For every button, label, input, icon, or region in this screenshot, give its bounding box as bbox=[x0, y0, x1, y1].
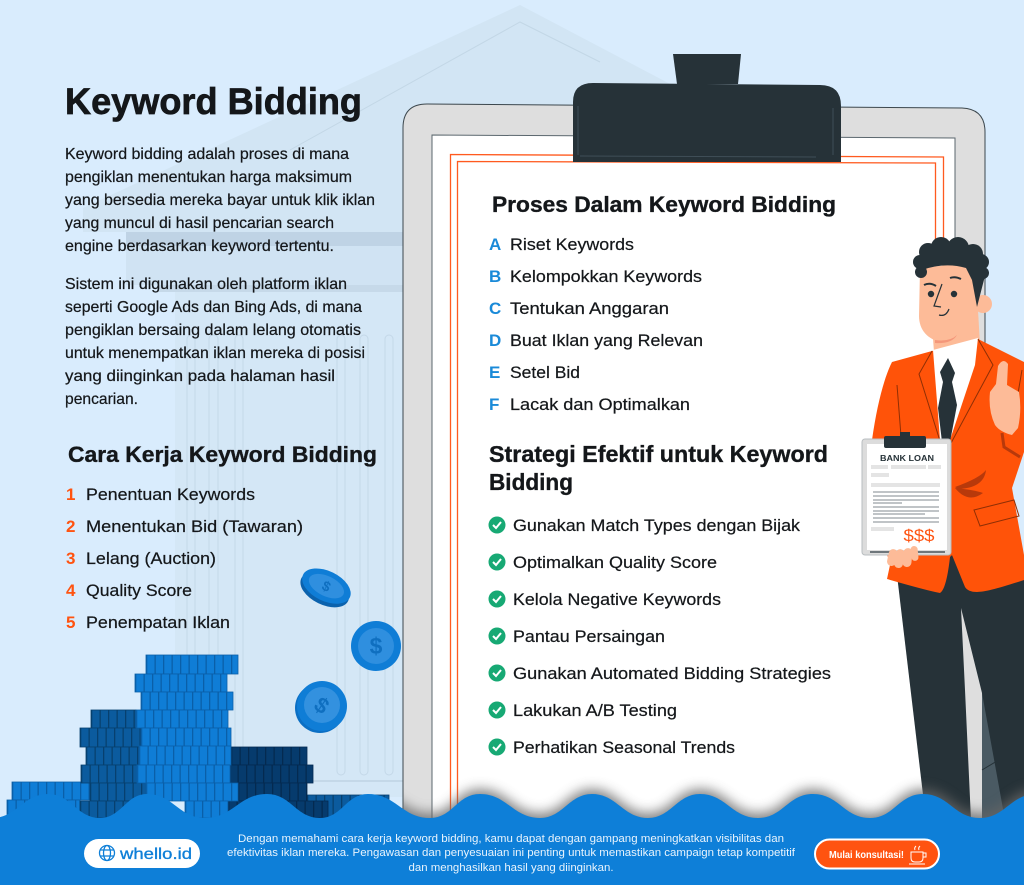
small clipboard: BANK LOAN bbox=[880, 454, 934, 463]
coin stacks bbox=[7, 655, 389, 818]
title: Keyword Bidding bbox=[65, 81, 362, 122]
heading: cara kerja: Cara Kerja Keyword Bidding bbox=[68, 442, 377, 467]
text block: definition paragraph: engine berdasarkan keyword tertentu. bbox=[65, 238, 334, 255]
small clipboard bbox=[862, 432, 951, 555]
text block: system paragraph: Sistem ini digunakan oleh platform iklan bbox=[65, 276, 347, 293]
numbered list: cara kerja: Penentuan Keywords bbox=[86, 485, 255, 504]
badge: whello.id bbox=[84, 839, 200, 868]
numbered list: cara kerja: Menentukan Bid (Tawaran) bbox=[86, 517, 303, 536]
footer text: dan menghasilkan hasil yang diinginkan. bbox=[408, 862, 614, 874]
icon: falling coin 2 bbox=[351, 621, 401, 671]
hair bbox=[913, 237, 989, 307]
numbered list: cara kerja: 1 bbox=[66, 485, 75, 504]
checklist: strategi: Gunakan Automated Bidding Strategies bbox=[513, 664, 831, 683]
numbered list: cara kerja: Quality Score bbox=[86, 581, 192, 600]
icon: falling coin 2: $ bbox=[370, 633, 383, 659]
footer band with wave edge bbox=[0, 794, 1024, 885]
icon: falling coin 1 bbox=[295, 561, 356, 615]
heading: strategi: Strategi Efektif untuk Keyword bbox=[489, 441, 828, 467]
checklist: strategi bbox=[488, 516, 831, 757]
panel: clipboard bbox=[403, 54, 985, 830]
button: mulai konsultasi bbox=[815, 840, 939, 868]
footer text bbox=[227, 833, 796, 874]
orange frame bbox=[450, 154, 944, 830]
text block: definition paragraph bbox=[65, 146, 375, 255]
text block: definition paragraph: Keyword bidding adalah proses di mana bbox=[65, 146, 349, 163]
heading: proses: Proses Dalam Keyword Bidding bbox=[492, 192, 836, 217]
checklist: strategi: Kelola Negative Keywords bbox=[513, 590, 721, 609]
checklist: strategi: Perhatikan Seasonal Trends bbox=[513, 738, 735, 757]
jacket details bbox=[955, 470, 986, 497]
checklist: strategi: Optimalkan Quality Score bbox=[513, 553, 717, 572]
facial features bbox=[924, 277, 961, 315]
background building illustration bbox=[83, 5, 710, 797]
icon: globe bbox=[100, 846, 114, 860]
small clipboard: $$$ bbox=[904, 526, 935, 545]
lettered list: proses bbox=[489, 235, 703, 414]
button: mulai konsultasi: Mulai konsultasi! bbox=[829, 850, 904, 861]
footer text: efektivitas iklan mereka. Pengawasan dan penyesuaian ini penting untuk memastikan campaign tetap kompetitif bbox=[227, 847, 796, 859]
icon: falling coin 1: $ bbox=[319, 577, 334, 595]
face bbox=[919, 262, 977, 342]
text block: system paragraph bbox=[65, 276, 365, 408]
checklist: strategi: Gunakan Match Types dengan Bijak bbox=[513, 516, 801, 535]
clipboard clip bbox=[573, 54, 841, 162]
checklist: strategi: Pantau Persaingan bbox=[513, 627, 665, 646]
lapels bbox=[897, 339, 1022, 445]
lettered list: proses: Buat Iklan yang Relevan bbox=[510, 331, 703, 350]
text block: definition paragraph: yang bersedia mereka bayar untuk klik iklan bbox=[65, 192, 375, 209]
lettered list: proses: D bbox=[489, 331, 501, 350]
numbered list: cara kerja bbox=[66, 485, 303, 632]
heading: strategi: Bidding bbox=[489, 469, 573, 495]
text block: system paragraph: pencarian. bbox=[65, 391, 138, 408]
lettered list: proses: B bbox=[489, 267, 501, 286]
numbered list: cara kerja: Lelang (Auction) bbox=[86, 549, 216, 568]
heading: strategi bbox=[489, 441, 828, 495]
text block: system paragraph: yang diinginkan pada halaman hasil bbox=[65, 368, 335, 385]
numbered list: cara kerja: 3 bbox=[66, 549, 75, 568]
hand holding clipboard bbox=[886, 546, 919, 569]
footer wave shadow bbox=[403, 780, 1024, 818]
text block: system paragraph: seperti Google Ads dan Bing Ads, di mana bbox=[65, 299, 362, 316]
lettered list: proses: F bbox=[489, 395, 499, 414]
text block: system paragraph: untuk menempatkan iklan mereka di posisi bbox=[65, 345, 365, 362]
numbered list: cara kerja: 4 bbox=[66, 581, 76, 600]
lettered list: proses: Kelompokkan Keywords bbox=[510, 267, 702, 286]
checklist: strategi: Lakukan A/B Testing bbox=[513, 701, 677, 720]
text block: definition paragraph: pengiklan menentukan harga maksimum bbox=[65, 169, 352, 186]
lettered list: proses: Riset Keywords bbox=[510, 235, 634, 254]
illustration: businessman bbox=[862, 237, 1024, 820]
footer text: Dengan memahami cara kerja keyword bidding, kamu dapat dengan gampang meningkatkan visibilitas dan bbox=[238, 833, 784, 845]
lettered list: proses: Tentukan Anggaran bbox=[510, 299, 669, 318]
thumbs up hand bbox=[990, 361, 1020, 457]
badge: whello.id: whello.id bbox=[119, 846, 192, 863]
icon: falling coin 3 bbox=[295, 681, 347, 733]
icon: falling coin 3: $ bbox=[310, 692, 334, 719]
icon: coffee cup bbox=[909, 846, 926, 864]
clipboard board bbox=[403, 104, 985, 830]
lettered list: proses: Lacak dan Optimalkan bbox=[510, 395, 690, 414]
shirt bbox=[933, 338, 978, 440]
lettered list: proses: C bbox=[489, 299, 501, 318]
trousers bbox=[897, 555, 1024, 820]
numbered list: cara kerja: 5 bbox=[66, 613, 75, 632]
tie bbox=[938, 358, 957, 442]
clipboard paper bbox=[432, 135, 955, 830]
jacket bbox=[872, 339, 1024, 593]
text block: definition paragraph: yang muncul di hasil pencarian search bbox=[65, 215, 334, 232]
lettered list: proses: A bbox=[489, 235, 501, 254]
neck bbox=[932, 310, 980, 352]
lettered list: proses: Setel Bid bbox=[510, 363, 580, 382]
text block: system paragraph: pengiklan bersaing dalam lelang otomatis bbox=[65, 322, 361, 339]
numbered list: cara kerja: 2 bbox=[66, 517, 75, 536]
lettered list: proses: E bbox=[489, 363, 500, 382]
numbered list: cara kerja: Penempatan Iklan bbox=[86, 613, 230, 632]
